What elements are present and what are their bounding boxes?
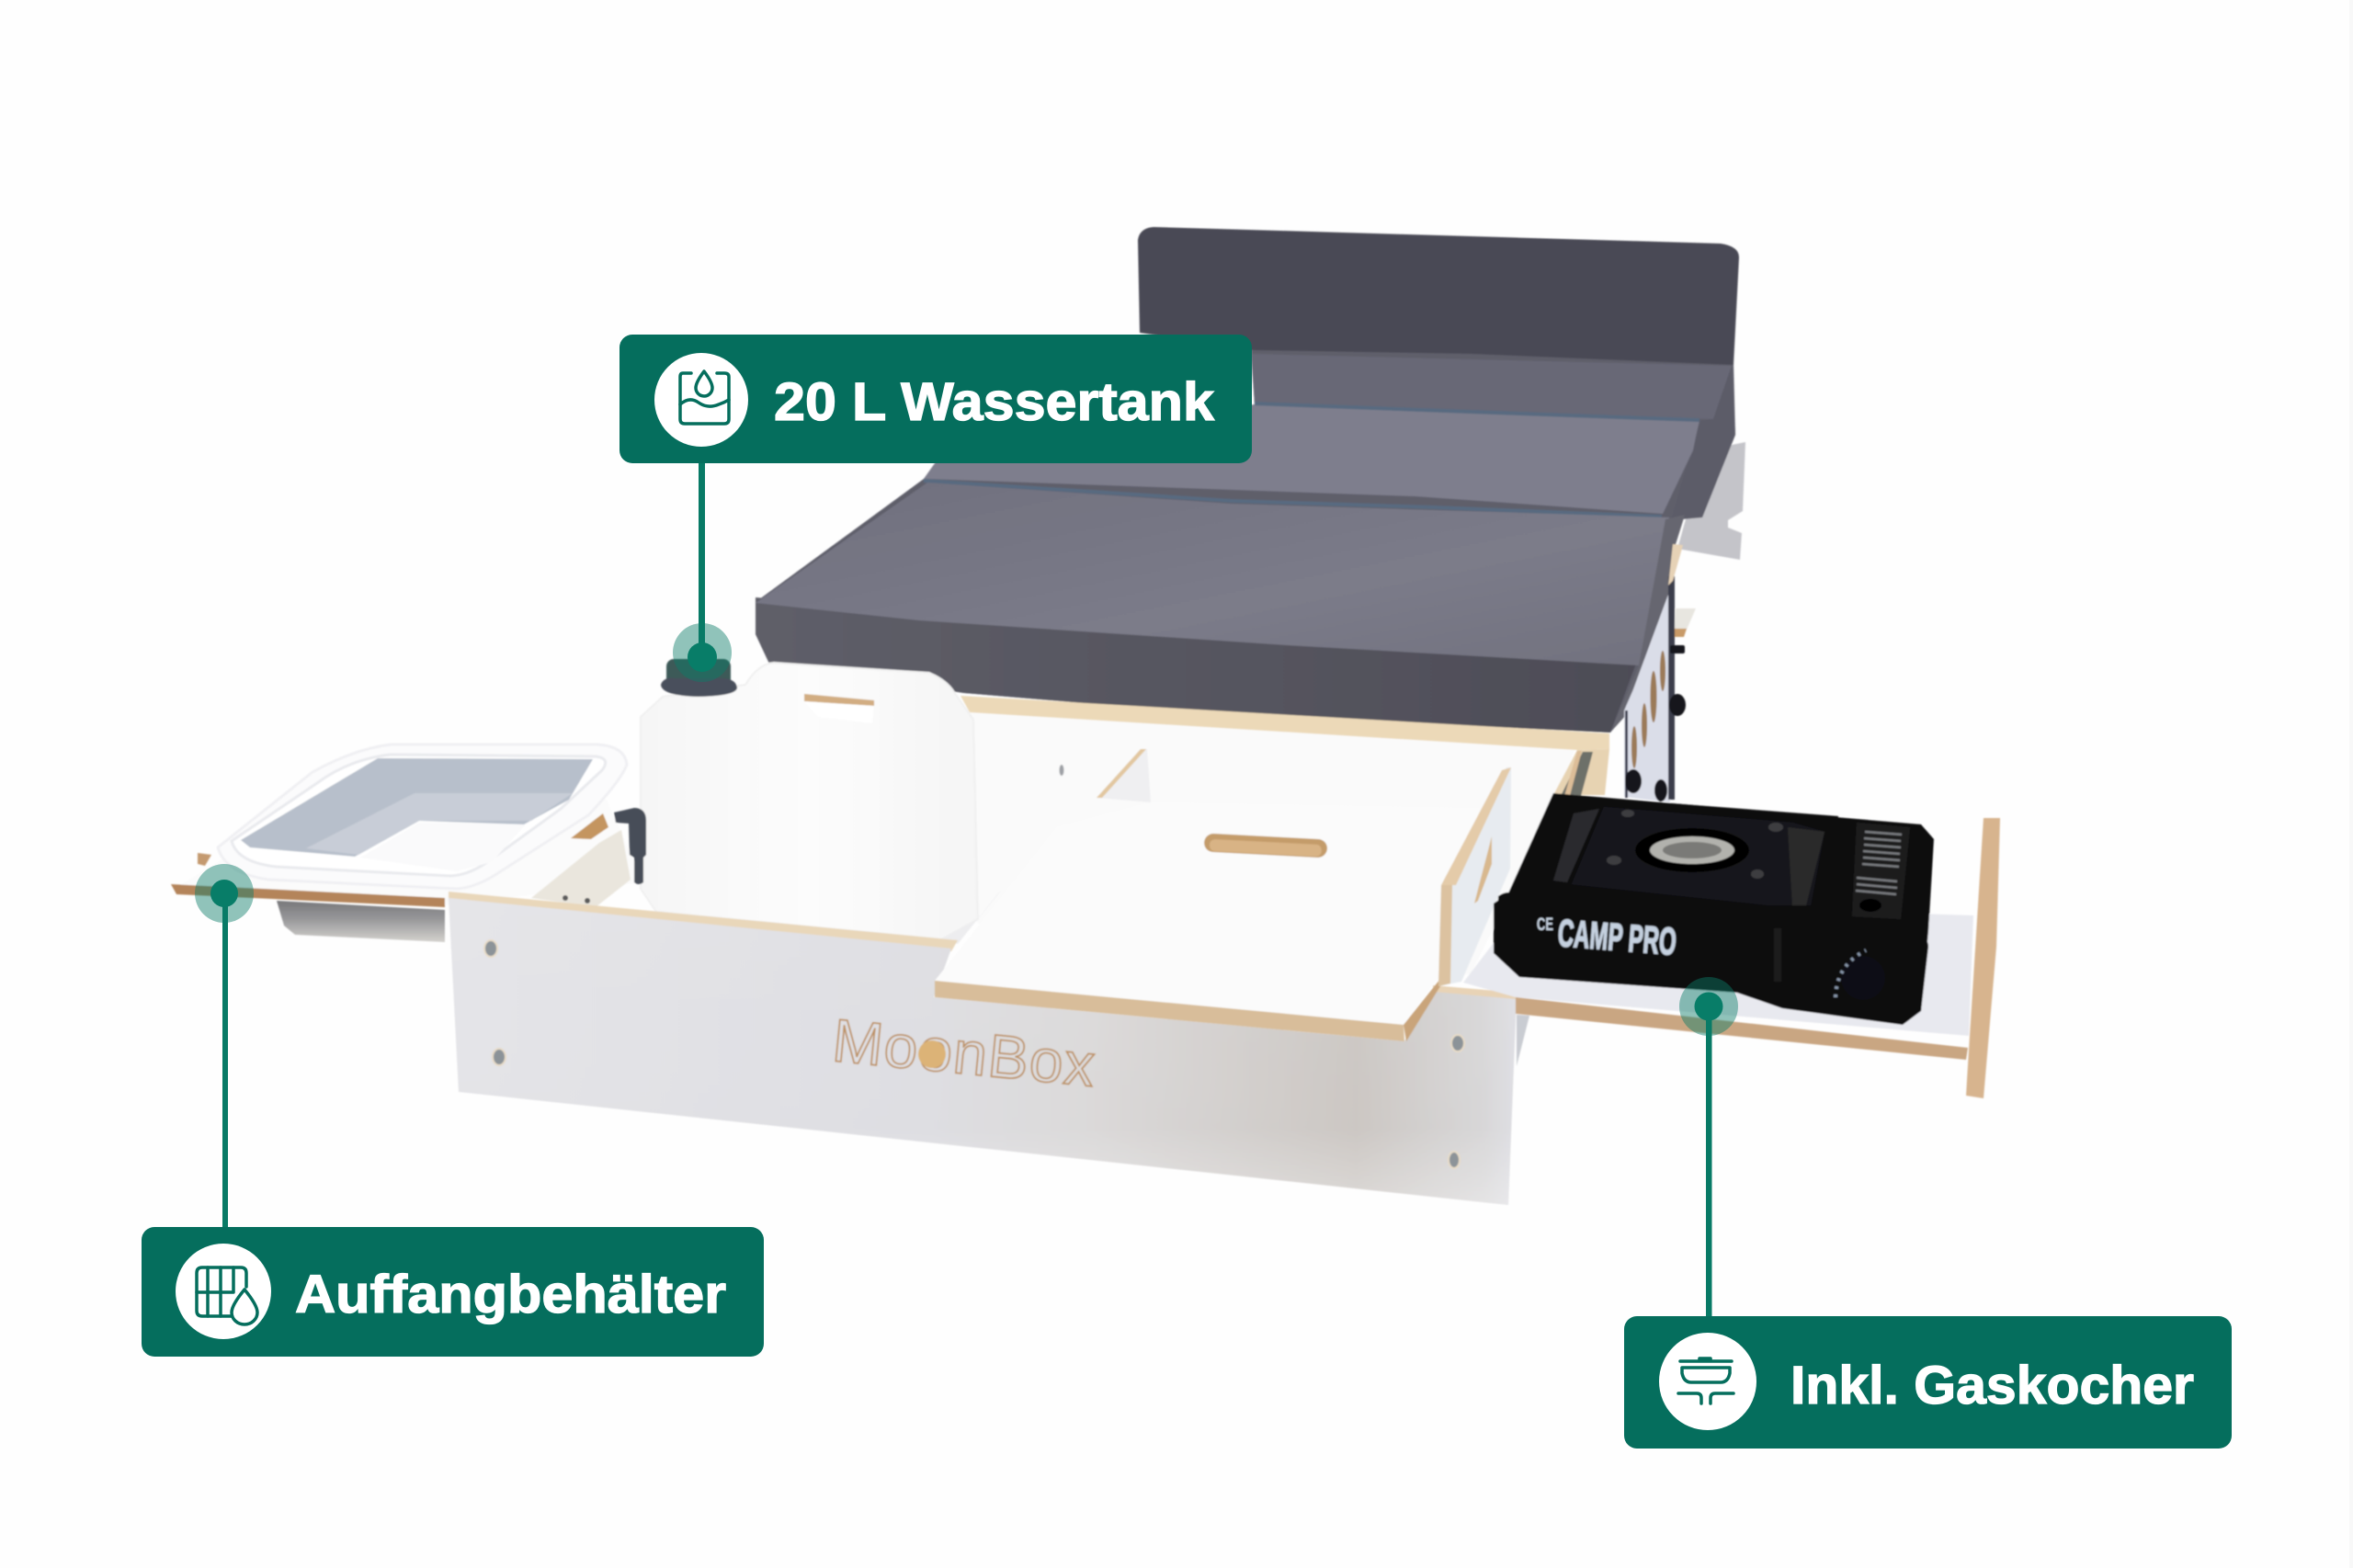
callout: 20 L Wassertank [620,335,1252,682]
stove shelf [1463,901,1973,1036]
marker dot on canister [673,623,732,682]
CE mark: CE [1537,915,1553,935]
stove front panel [1496,892,1928,1022]
sliver under shelf [1517,1015,1529,1066]
front panel [449,898,1517,1205]
mattress seams [924,403,1699,517]
label text: Inkl. Gaskocher [1790,1356,2194,1415]
rear grey bracket [1677,442,1745,560]
connector line to basin [222,896,228,1229]
plywood upright with grip [1438,767,1511,986]
label text: 20 L Wassertank [774,372,1215,432]
screws [484,940,1464,1168]
marker dot on stove [1679,977,1738,1036]
label box [142,1227,764,1357]
interior divider [1059,749,1151,802]
callout: Auffangbehälter [142,864,764,1357]
info label [1852,823,1910,919]
icon: basin with droplet [176,1244,271,1339]
shelf wood edge [171,884,445,907]
stove top shell [1508,795,1838,924]
rear right corner drawer rail [1553,749,1609,796]
burner plate [1572,807,1824,905]
product photo: MoonBox camping unit [171,227,2000,1205]
front left panel wood edge [449,892,958,951]
shelf front wood edge [1516,997,1968,1060]
front mattress side [756,597,1639,733]
pan supports [1607,810,1783,879]
right plywood upright [1966,818,2000,1098]
back mattress section [1251,354,1735,520]
basin underside [277,901,445,942]
left shelf under the basin [176,800,643,905]
lid handle slot [1204,834,1327,858]
rear plywood frame [961,696,1609,750]
gas stove [1494,793,1934,1025]
label box [1624,1316,2232,1449]
connector line to stove [1706,1011,1711,1318]
front mattress top [756,483,1669,665]
mattress base silhouette [756,347,1735,733]
label text: Auffangbehälter [295,1265,726,1324]
icon: water tank [654,353,748,447]
callout: Inkl. Gaskocher [1624,977,2232,1449]
water canister [641,659,1002,944]
right side panel with slots and knobs [1624,544,1696,802]
interior of the box [970,712,1574,974]
water valve [614,808,646,884]
label box [620,335,1252,463]
CAMP PRO lettering: CAMP PRO [1556,911,1678,963]
burner [1650,836,1734,864]
collapsible basin [218,744,627,889]
bracket next to the valve [531,813,631,907]
headrest cushion [1138,227,1739,365]
lid [935,802,1507,1041]
middle mattress section [924,404,1699,514]
marker dot on basin [195,864,254,923]
connector line to canister [699,460,705,658]
stove body [1494,793,1934,1025]
canister cap [661,659,737,697]
MoonBox logo engraving: MoonBox [830,1006,1099,1099]
mattress right side [1610,515,1685,733]
control knob [1774,928,1885,1000]
icon: cooking pot on burner [1659,1333,1756,1430]
